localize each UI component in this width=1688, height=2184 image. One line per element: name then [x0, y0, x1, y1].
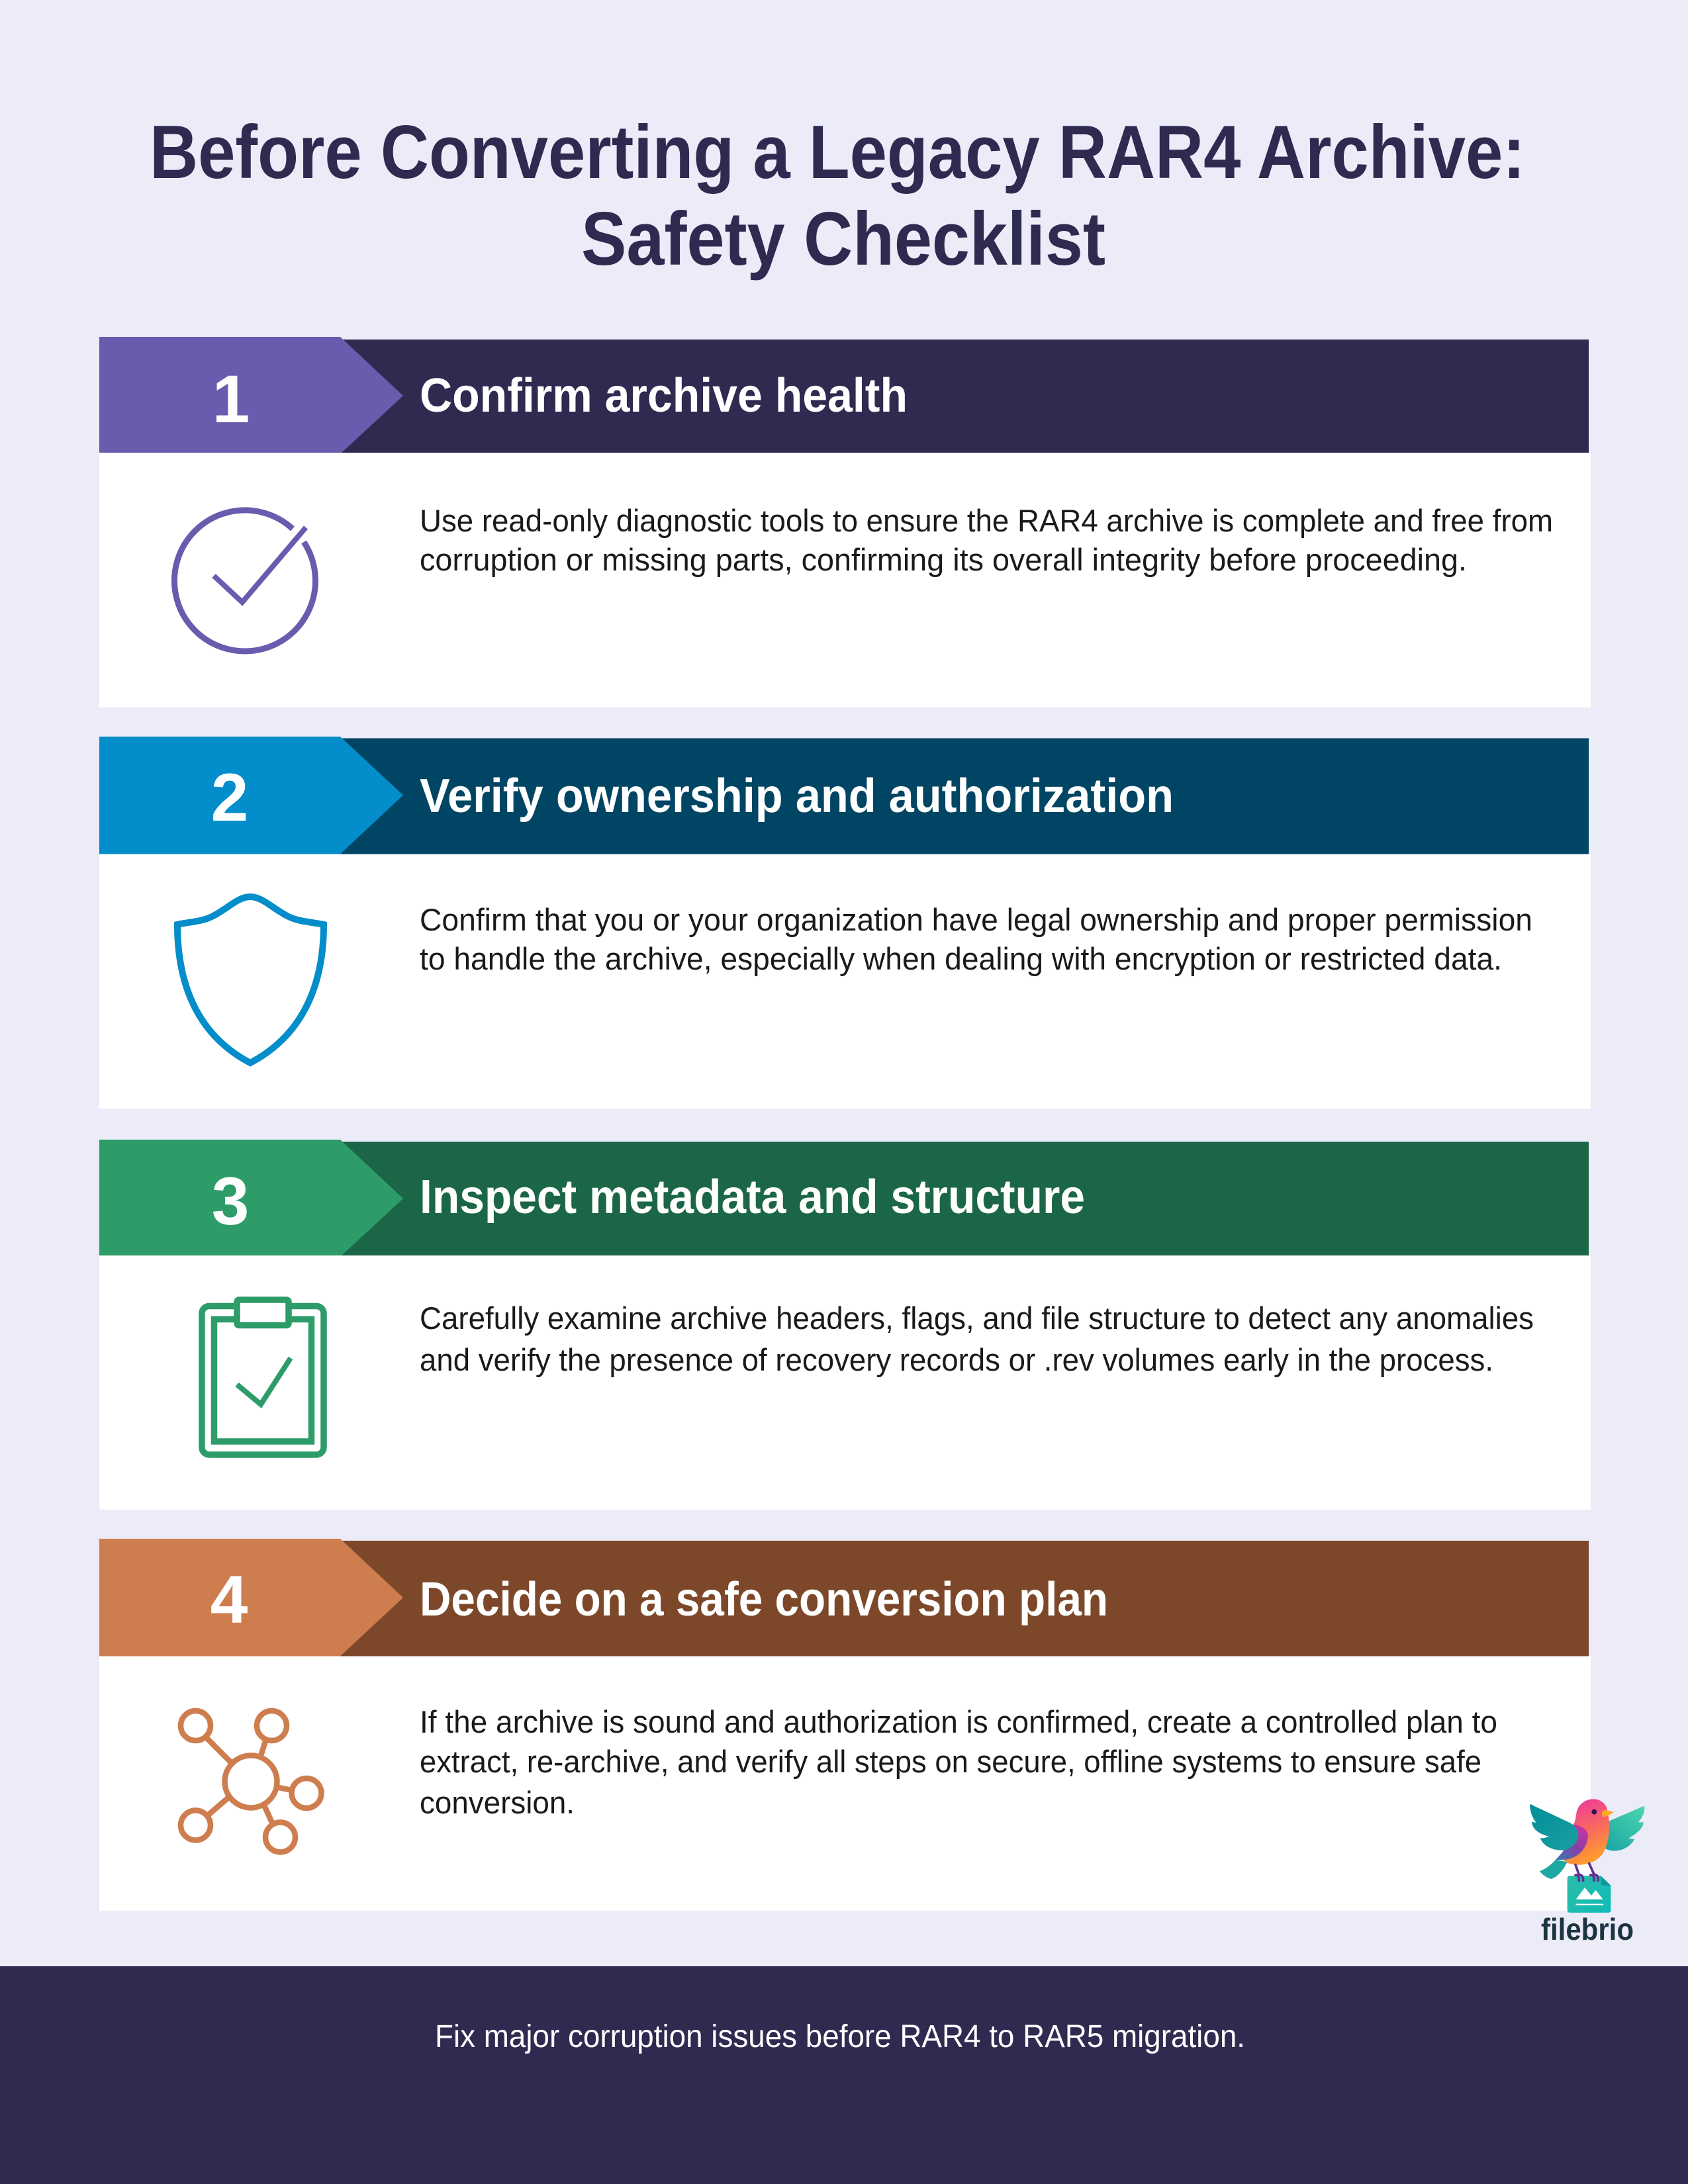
panel: step 3 inspect metadata — [99, 1140, 1591, 1510]
step 1 body card — [99, 453, 1591, 707]
logo wordmark: filebrio — [1541, 1912, 1634, 1946]
icon: circled check mark — [174, 510, 315, 651]
step 4 description: If the archive is sound and authorization is confirmed, create a controlled plan to — [420, 1704, 1497, 1739]
bird and file illustration — [1530, 1799, 1644, 1913]
step 3 description: and verify the presence of recovery records or .rev volumes early in the process. — [420, 1342, 1493, 1377]
step 4 description — [420, 1704, 1497, 1820]
step 4 body card — [99, 1656, 1591, 1911]
step 2 heading: Verify ownership and authorization — [420, 770, 1174, 823]
icon: clipboard with check — [202, 1300, 324, 1455]
step 2 header bar — [331, 739, 1589, 854]
step 3 number: 3 — [212, 1163, 249, 1239]
step 4 heading: Decide on a safe conversion plan — [420, 1573, 1108, 1626]
panel: step 1 confirm archive health — [99, 337, 1591, 707]
panel: step 4 conversion plan — [99, 1539, 1591, 1911]
step 4 description: extract, re-archive, and verify all steps on secure, offline systems to ensure safe — [420, 1744, 1481, 1779]
step 2 description: Confirm that you or your organization have legal ownership and proper permission — [420, 902, 1532, 937]
title: Before Converting a Legacy RAR4 Archive: — [150, 111, 1525, 195]
step 3 heading: Inspect metadata and structure — [420, 1171, 1085, 1224]
logo: filebrio bird — [1530, 1799, 1644, 1946]
step 2 description: to handle the archive, especially when dealing with encryption or restricted data. — [420, 941, 1502, 976]
step 1 heading: Confirm archive health — [420, 369, 908, 422]
title: Safety Checklist — [581, 197, 1105, 281]
footer band — [0, 1966, 1688, 2184]
step 4 number: 4 — [211, 1562, 248, 1637]
step 4 number arrow — [99, 1539, 403, 1656]
panel: step 2 verify ownership — [99, 737, 1591, 1109]
step 4 description: conversion. — [420, 1785, 575, 1820]
step 3 description — [420, 1300, 1534, 1377]
icon: shield — [177, 897, 324, 1063]
step 2 body card — [99, 854, 1591, 1109]
footer note: Fix major corruption issues before RAR4 to RAR5 migration. — [435, 2019, 1245, 2054]
step 1 description — [420, 503, 1553, 577]
step 3 description: Carefully examine archive headers, flags, and file structure to detect any anomalies — [420, 1300, 1534, 1336]
step 1 description: Use read-only diagnostic tools to ensure the RAR4 archive is complete and free from — [420, 503, 1553, 538]
step 3 header bar — [331, 1142, 1589, 1255]
step 4 header bar — [331, 1541, 1589, 1656]
step 1 description: corruption or missing parts, confirming its overall integrity before proceeding. — [420, 542, 1467, 577]
step 2 description — [420, 902, 1532, 976]
step 3 number arrow — [99, 1140, 403, 1255]
step 2 number arrow — [99, 737, 403, 854]
step 1 number: 1 — [212, 361, 250, 437]
step 1 number arrow — [99, 337, 403, 453]
step 1 header bar — [331, 340, 1589, 453]
icon: network hub — [181, 1711, 322, 1852]
title — [150, 111, 1525, 281]
step 2 number: 2 — [211, 760, 248, 835]
step 3 body card — [99, 1255, 1591, 1510]
